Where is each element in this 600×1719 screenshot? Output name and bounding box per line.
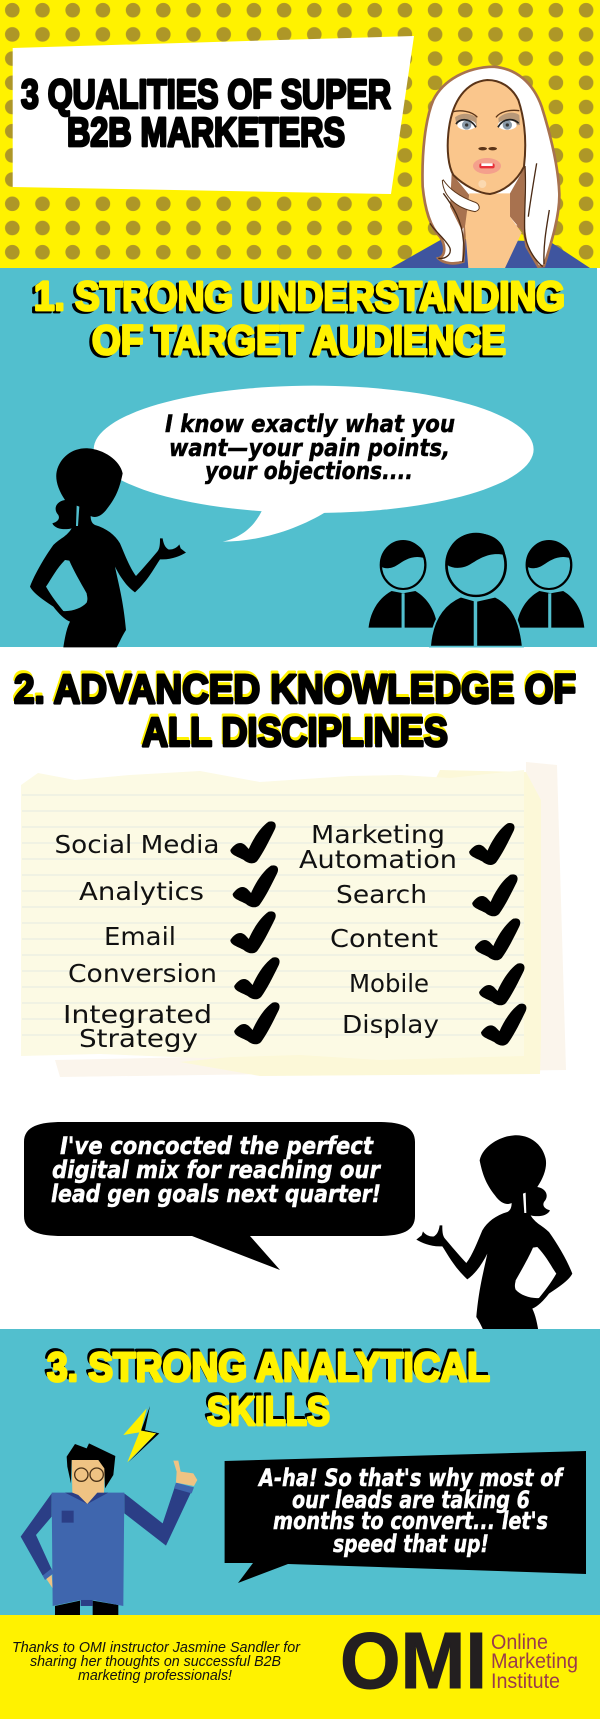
discipline list: Strategy <box>79 1024 198 1053</box>
title: B2B MARKETERS <box>67 109 345 155</box>
heading 1: OF TARGET AUDIENCE <box>92 317 506 363</box>
panel: section 3 <box>0 1329 600 1615</box>
credit text: Thanks to OMI instructor Jasmine Sandler for <box>12 1639 301 1656</box>
discipline list: Conversion <box>68 959 217 988</box>
discipline list: Search <box>336 880 427 909</box>
heading 3 <box>47 1344 490 1434</box>
credit text: sharing her thoughts on successful B2B <box>30 1653 281 1670</box>
logo: OMI: Online <box>491 1630 548 1654</box>
speech bubble: angled black: speed that up! <box>333 1530 489 1558</box>
speech bubble: white: want—your pain points, <box>169 434 450 462</box>
discipline list: Display <box>342 1010 439 1039</box>
illustration: man with glasses <box>21 1443 197 1615</box>
discipline list: Analytics <box>79 877 204 906</box>
logo: OMI: Institute <box>491 1669 560 1693</box>
check marks <box>230 821 526 1046</box>
speech bubble: black: lead gen goals next quarter! <box>51 1180 381 1208</box>
title: 3 QUALITIES OF SUPER <box>21 71 391 117</box>
title banner <box>13 36 414 194</box>
heading 1 <box>34 273 565 363</box>
logo: OMI: OMI <box>340 1616 487 1705</box>
title <box>21 71 391 155</box>
discipline list <box>54 820 457 1053</box>
speech bubble: angled black: our leads are taking 6 <box>292 1486 530 1514</box>
heading 2: ALL DISCIPLINES <box>142 709 448 755</box>
logo: OMI <box>340 1616 578 1705</box>
discipline list: Automation <box>299 845 457 874</box>
discipline list: Mobile <box>349 969 429 998</box>
panel: header <box>0 0 600 268</box>
heading 3: 3. STRONG ANALYTICAL <box>47 1344 490 1390</box>
speech bubble: angled black <box>225 1451 586 1583</box>
credit text <box>12 1639 301 1684</box>
heading 2 <box>14 666 576 755</box>
logo: OMI: Marketing <box>491 1649 578 1673</box>
speech bubble: white: I know exactly what you <box>165 410 455 438</box>
icon: woman silhouette mirrored <box>416 1135 572 1334</box>
icon: lightning bolt <box>123 1406 159 1462</box>
speech bubble: black: I've concocted the perfect <box>60 1132 374 1160</box>
discipline list: Marketing <box>311 820 445 849</box>
illustration: blonde woman <box>391 67 590 268</box>
credit text: marketing professionals! <box>78 1667 233 1684</box>
discipline list: Content <box>330 924 438 953</box>
speech bubble: black <box>24 1122 415 1270</box>
discipline list: Integrated <box>63 1000 212 1029</box>
notepaper <box>21 762 566 1077</box>
discipline list: Email <box>104 922 176 951</box>
icon: audience of three <box>369 533 584 647</box>
panel: footer <box>0 1615 600 1719</box>
speech bubble: white <box>94 386 534 542</box>
speech bubble: black: digital mix for reaching our <box>52 1156 382 1184</box>
discipline list: Social Media <box>54 830 220 859</box>
panel: section 1 <box>0 268 597 647</box>
panel: section 2 <box>14 666 576 1334</box>
icon: woman silhouette <box>30 448 186 647</box>
heading 3: SKILLS <box>207 1388 330 1434</box>
speech bubble: white: your objections.... <box>205 457 413 485</box>
